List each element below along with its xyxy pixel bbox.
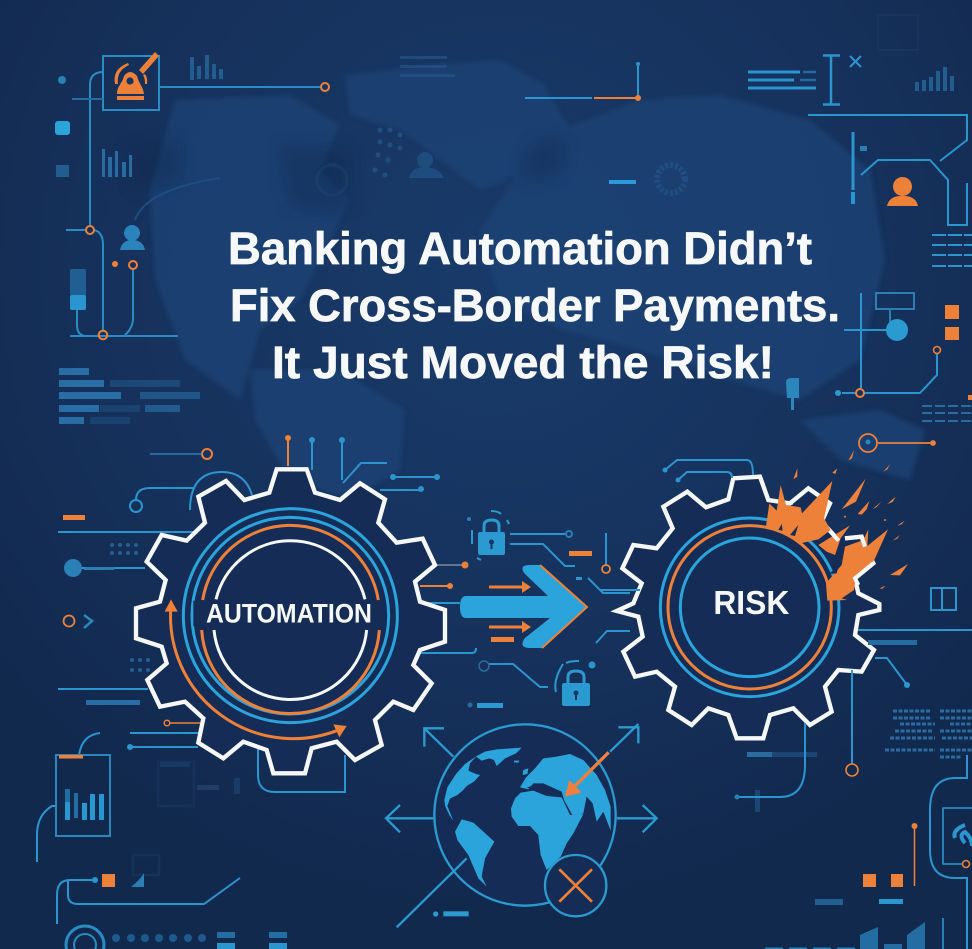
connector accents bbox=[467, 517, 610, 708]
globe arrows bbox=[386, 724, 657, 927]
small orange arrows bbox=[489, 581, 531, 642]
left data bars bbox=[59, 368, 200, 424]
globe bbox=[386, 724, 657, 927]
automation label: AUTOMATION bbox=[206, 599, 372, 629]
icon: lock top bbox=[472, 511, 509, 560]
icon: orange person bbox=[887, 177, 918, 206]
x badge bbox=[545, 855, 606, 916]
title: Banking Automation Didn’t bbox=[228, 223, 812, 274]
bottom-left headset and dots bbox=[66, 926, 287, 949]
bottom-right rounded circuit bbox=[930, 755, 972, 949]
title: It Just Moved the Risk! bbox=[272, 337, 774, 388]
right gear nodes bbox=[662, 468, 917, 800]
center arrow bbox=[460, 565, 588, 648]
automation rings bbox=[171, 509, 397, 739]
title: Fix Cross-Border Payments. bbox=[230, 280, 840, 331]
dark map shadows bbox=[125, 135, 565, 215]
title bbox=[228, 223, 840, 388]
left mid nodes bbox=[63, 435, 468, 750]
orange arrow into globe bbox=[565, 752, 609, 797]
flame cracks bbox=[778, 524, 838, 574]
mediterranean and red sea bbox=[527, 784, 562, 796]
icon: alarm bbox=[115, 52, 159, 100]
faint world map bbox=[150, 60, 925, 500]
continents bbox=[444, 748, 611, 887]
bottom-left node bbox=[92, 873, 144, 887]
top-right circuit panel bbox=[525, 56, 972, 421]
right ring connector bbox=[859, 434, 935, 452]
top-right nodes and icons bbox=[594, 62, 972, 410]
faint background data marks bbox=[133, 15, 918, 875]
gear: automation bbox=[136, 469, 445, 773]
left mid circuit lines bbox=[37, 437, 476, 924]
lock top connectors bbox=[488, 531, 630, 687]
right gear connectors bbox=[600, 460, 972, 797]
risk label: RISK bbox=[713, 585, 789, 622]
globe diagonal inner bbox=[450, 858, 467, 875]
orange squares right bbox=[945, 305, 959, 340]
risk rings bbox=[660, 518, 839, 697]
bottom-right panel bbox=[765, 823, 925, 949]
flame white fragments bbox=[786, 503, 873, 585]
top-left nodes and charts bbox=[55, 55, 329, 339]
icon: lock bottom bbox=[555, 661, 590, 706]
automation arrowheads bbox=[165, 599, 347, 737]
report chart panel bbox=[56, 755, 110, 836]
gear: risk bbox=[617, 450, 908, 738]
explosion shards bbox=[766, 450, 908, 601]
top-left circuit panel bbox=[66, 56, 321, 336]
right data dots bbox=[885, 711, 972, 757]
